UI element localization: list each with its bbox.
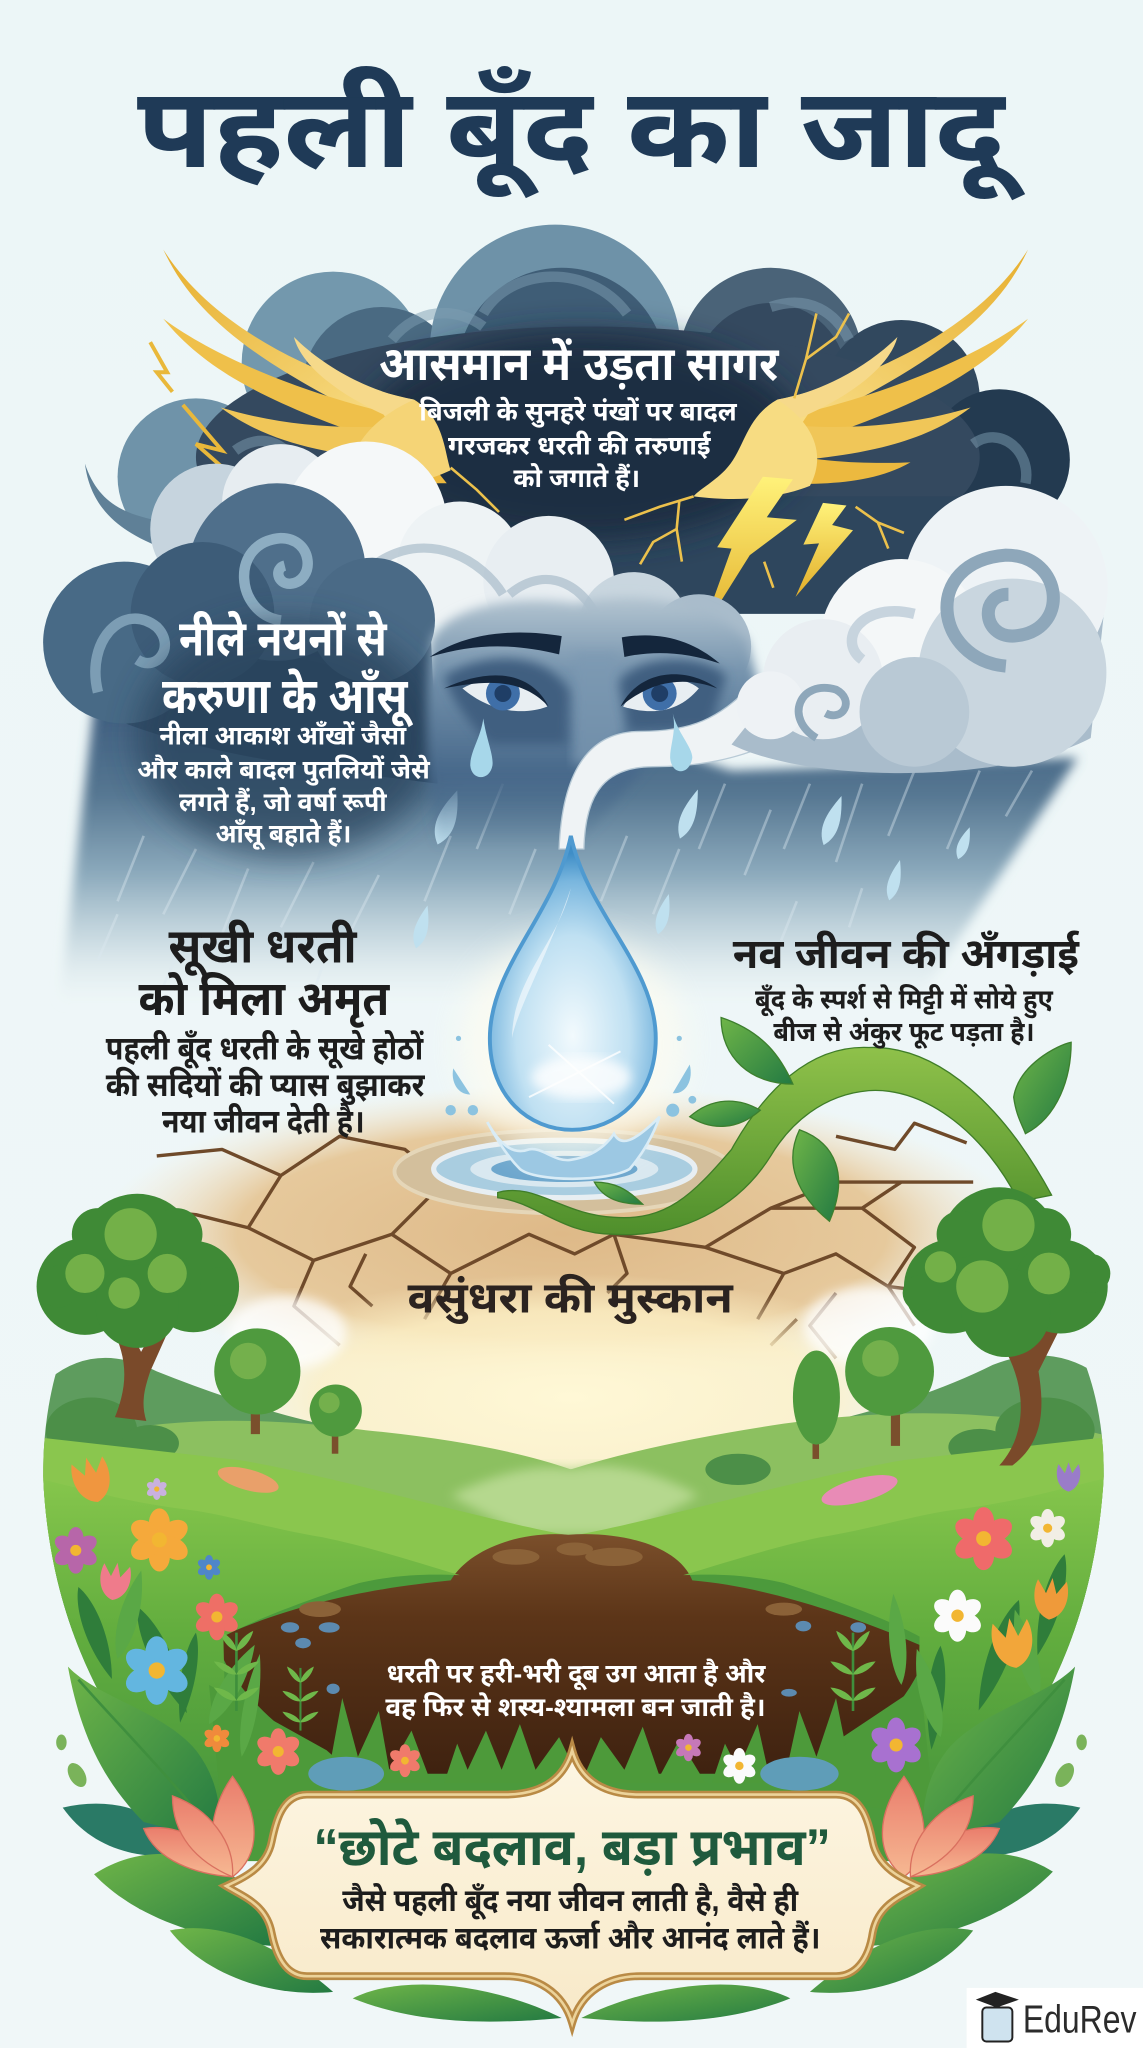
tear left [470,718,493,777]
panel: sprouting vine [498,1017,1071,1235]
text: tears of compassion: करुणा के आँसू [162,668,413,728]
rain curtain [59,679,1078,1006]
text: dry earth nectar [106,920,425,1139]
text: dry earth nectar: को मिला अमृत [138,972,390,1028]
text: soil caption: वह फिर से शस्य-श्यामला बन जाती है। [385,1692,765,1722]
text: tears of compassion: लगते हैं, जो वर्षा रूपी [179,787,388,817]
golden right wing [694,249,1028,499]
front hills [33,1477,1110,1868]
right lotus [882,1776,999,1877]
icon: graduation cap [976,1992,1019,2041]
text: new life [733,930,1080,1049]
golden left wing [163,249,451,485]
title: पहली बूँद का जादू [137,65,1025,201]
bushes [46,1398,1095,1485]
small trees [214,1327,934,1459]
panel: framing leaves and lotus [56,1667,1087,2022]
meadow base [39,1567,1110,1868]
text: sky ocean: बिजली के सुनहरे पंखों पर बादल [419,397,737,428]
text: tears of compassion: आँसू बहाते हैं। [216,818,351,850]
panel: cracked earth [98,1084,1025,1384]
text: sky ocean [379,337,780,493]
left eye [444,675,549,711]
text: soil caption: धरती पर हरी-भरी दूब उग आता है और [387,1658,766,1690]
sad face with eyes [427,597,771,849]
scatter dots [56,1735,1087,1911]
text: sky ocean: को जगाते हैं। [513,463,640,493]
dark upper cloud [118,225,1070,614]
eye sockets [444,659,726,744]
panel: storm clouds [43,225,1108,1006]
banner line one: जैसे पहली बूँद नया जीवन लाती है, वैसे ही [342,1881,799,1920]
text: new life: बूँद के स्पर्श से मिट्टी में सोये हुए [755,983,1054,1018]
text: smile of earth: वसुंधरा की मुस्कान [408,1274,734,1324]
text: tears of compassion [137,611,430,850]
text: dry earth nectar: सूखी धरती [169,920,357,977]
banner line two: सकारात्मक बदलाव ऊर्जा और आनंद लाते हैं। [320,1920,820,1956]
text: tears of compassion: और काले बादल पुतलियों जेसे [137,754,430,785]
text: dry earth nectar: पहली बूँद धरती के सूखे होठों [106,1029,424,1068]
meadow leaves [70,1552,1074,1758]
grass tufts [332,1698,844,1774]
wildflowers [52,1453,1080,1784]
droplets [445,1036,696,1117]
left lotus [144,1776,254,1877]
right tree [903,1187,1110,1465]
upper hills [33,1437,1110,1574]
white middle cloud [85,441,751,699]
cracks [131,1123,973,1358]
callout banner [226,1750,918,2023]
crown splash [487,1117,660,1179]
left tree [37,1194,239,1421]
sprigs [212,1629,877,1731]
panel: water drop and splash [394,836,734,1213]
right eye [620,674,717,711]
text: soil caption [385,1658,766,1722]
panel: landscape [33,1273,1110,1868]
blue rocks [308,1757,839,1791]
water stream [559,686,810,849]
text: new life: नव जीवन की अँगड़ाई [733,930,1080,977]
text: sky ocean: आसमान में उड़ता सागर [379,337,780,390]
text: dry earth nectar: की सदियों की प्यास बुझाकर [106,1066,425,1105]
soil patch [216,1534,927,1774]
banner heading: “छोटे बदलाव, बड़ा प्रभाव” [314,1817,831,1877]
nose bridge [572,653,624,764]
text: tears of compassion: नीला आकाश आँखों जैसा [159,720,408,750]
leaves [594,1017,1071,1221]
logo: EduRev [967,1988,1143,2048]
text: dry earth nectar: नया जीवन देती है। [162,1102,364,1139]
drop [490,836,656,1130]
eyebrows [430,633,720,664]
text: tears of compassion: नीले नयनों से [179,611,388,667]
dark left cloud [43,483,438,856]
lightning bolts [150,313,904,632]
tear right [670,713,692,771]
sky glow [205,1273,937,1522]
text: sky ocean: गरजकर धरती की तरुणाई [448,431,712,461]
lower meadow corners [209,1685,924,1760]
glow [461,934,683,1156]
text: new life: बीज से अंकुर फूट पड़ता है। [773,1016,1035,1049]
back hills [43,1355,1110,1633]
white right cloud [732,486,1108,773]
